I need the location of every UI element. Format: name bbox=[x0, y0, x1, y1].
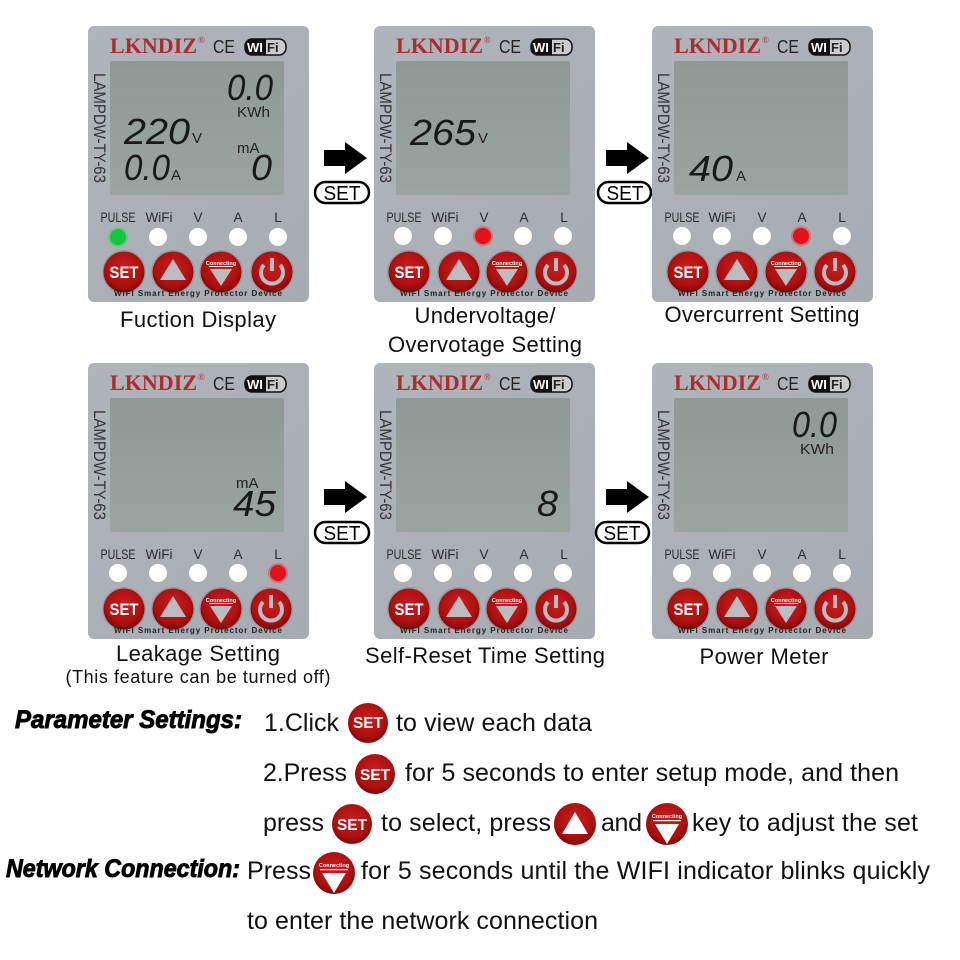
indicator labels: WiFi bbox=[432, 210, 458, 225]
indicator labels: L bbox=[838, 547, 846, 562]
indicator labels: PULSE bbox=[100, 210, 136, 225]
heading: parameter settings: Parameter Settings: bbox=[15, 706, 242, 734]
panel: function display bbox=[88, 26, 309, 302]
caption: overcurrent setting: Overcurrent Setting bbox=[664, 302, 860, 327]
CE and WiFi marks: CE bbox=[777, 374, 799, 394]
LCD screen bbox=[674, 61, 848, 195]
instruction line 2: 2.Press bbox=[263, 759, 347, 787]
LCD screen: 40 bbox=[689, 148, 733, 189]
indicator labels: L bbox=[560, 210, 568, 225]
indicator labels: L bbox=[274, 210, 282, 225]
brand logo: ® bbox=[484, 35, 491, 45]
panel: leakage setting bbox=[88, 363, 309, 639]
brand logo: LKNDIZ bbox=[674, 33, 761, 58]
brand logo: LKNDIZ bbox=[674, 370, 761, 395]
device footer: WIFI Smart Energy Protector Device bbox=[678, 626, 847, 635]
CE and WiFi marks bbox=[777, 374, 850, 394]
indicator labels: V bbox=[479, 547, 489, 562]
control buttons: SET bbox=[110, 600, 139, 619]
CE and WiFi marks: WI bbox=[533, 40, 549, 55]
indicator labels: WiFi bbox=[432, 547, 458, 562]
indicator labels: WiFi bbox=[146, 210, 172, 225]
indicator labels: WiFi bbox=[708, 210, 736, 225]
CE and WiFi marks: CE bbox=[499, 37, 521, 57]
brand logo: ® bbox=[762, 372, 769, 382]
CE and WiFi marks bbox=[499, 374, 572, 394]
caption: leakage setting bbox=[66, 641, 330, 687]
instruction line 4: for 5 seconds until the WIFI indicator blinks quickly bbox=[361, 857, 930, 885]
indicator labels: V bbox=[193, 547, 203, 562]
CE and WiFi marks bbox=[777, 37, 850, 57]
instruction line 2: SET bbox=[360, 767, 391, 784]
CE and WiFi marks: CE bbox=[777, 37, 799, 57]
device footer: WIFI Smart Energy Protector Device bbox=[400, 626, 569, 635]
CE and WiFi marks: Fi bbox=[831, 40, 843, 55]
CE and WiFi marks: Fi bbox=[267, 377, 279, 392]
CE and WiFi marks bbox=[213, 374, 286, 394]
caption: voltage setting bbox=[388, 303, 582, 357]
instruction line 3 bbox=[263, 803, 918, 845]
indicator labels: L bbox=[560, 547, 568, 562]
control buttons bbox=[102, 250, 294, 294]
instruction line 3: Connecting bbox=[652, 814, 682, 820]
LCD screen: A bbox=[736, 168, 746, 185]
model label: LAMPDW-TY-63 bbox=[376, 73, 394, 183]
CE and WiFi marks: WI bbox=[533, 377, 549, 392]
brand logo: LKNDIZ bbox=[110, 33, 197, 58]
model label: LAMPDW-TY-63 bbox=[654, 73, 672, 183]
arrow: voltage to current bbox=[598, 142, 651, 205]
indicator labels: WiFi bbox=[146, 547, 172, 562]
brand logo: LKNDIZ bbox=[110, 370, 197, 395]
LCD screen: 0.0 bbox=[792, 404, 837, 445]
indicator labels bbox=[100, 210, 282, 225]
CE and WiFi marks bbox=[213, 37, 286, 57]
LCD screen bbox=[674, 398, 848, 532]
caption: leakage setting: Leakage Setting bbox=[116, 641, 280, 666]
LCD screen bbox=[110, 61, 284, 195]
indicator labels bbox=[100, 547, 282, 562]
control buttons: Connecting bbox=[206, 598, 236, 604]
brand logo: ® bbox=[484, 372, 491, 382]
control buttons bbox=[666, 250, 857, 294]
indicator labels: A bbox=[797, 547, 807, 562]
indicator labels: V bbox=[757, 547, 767, 562]
brand logo: ® bbox=[198, 372, 205, 382]
arrow: function to voltage bbox=[315, 142, 369, 205]
CE and WiFi marks: WI bbox=[247, 377, 263, 392]
arrow: voltage to current: SET bbox=[606, 183, 644, 205]
control buttons bbox=[666, 587, 857, 631]
indicator labels bbox=[386, 547, 568, 562]
LCD screen: KWh bbox=[800, 441, 834, 458]
arrow: reset to meter: SET bbox=[604, 523, 640, 545]
arrow: function to voltage: SET bbox=[324, 183, 360, 205]
control buttons: Connecting bbox=[492, 261, 522, 267]
CE and WiFi marks: Fi bbox=[553, 377, 565, 392]
arrow: leakage to reset bbox=[315, 481, 369, 545]
indicator labels bbox=[664, 547, 846, 562]
LCD screen: V bbox=[478, 130, 488, 147]
LCD screen: 0.0 bbox=[227, 67, 273, 108]
CE and WiFi marks: WI bbox=[811, 377, 827, 392]
LCD screen: 265 bbox=[409, 112, 477, 153]
arrow: reset to meter bbox=[596, 481, 649, 545]
control buttons: Connecting bbox=[206, 261, 236, 267]
indicator lights bbox=[394, 564, 572, 582]
indicator labels: L bbox=[838, 210, 846, 225]
device footer: WIFI Smart Energy Protector Device bbox=[678, 289, 847, 298]
instruction line 3: SET bbox=[337, 817, 368, 834]
LCD screen bbox=[396, 61, 570, 195]
indicator labels: V bbox=[757, 210, 767, 225]
LCD screen: 0.0 bbox=[124, 147, 170, 188]
control buttons: SET bbox=[674, 600, 703, 619]
instruction line 3: press bbox=[263, 809, 324, 837]
brand logo: LKNDIZ bbox=[396, 33, 483, 58]
LCD screen: 45 bbox=[233, 483, 277, 524]
indicator labels bbox=[386, 210, 568, 225]
instruction line 4 bbox=[247, 852, 930, 894]
LCD screen: 8 bbox=[537, 483, 558, 524]
control buttons: SET bbox=[674, 263, 703, 282]
indicator lights bbox=[673, 564, 851, 582]
instruction line 4: Press bbox=[247, 857, 311, 885]
LCD screen: 0 bbox=[251, 147, 272, 188]
panel: power meter bbox=[652, 363, 873, 639]
caption: leakage setting: (This feature can be turned off) bbox=[66, 667, 330, 687]
instruction line 2 bbox=[263, 754, 899, 794]
indicator labels: PULSE bbox=[386, 547, 422, 562]
model label: LAMPDW-TY-63 bbox=[90, 73, 108, 183]
CE and WiFi marks: Fi bbox=[553, 40, 565, 55]
LCD screen: mA bbox=[236, 475, 258, 492]
control buttons bbox=[387, 250, 578, 294]
CE and WiFi marks: WI bbox=[247, 40, 263, 55]
indicator lights bbox=[109, 563, 288, 583]
instruction line 1 bbox=[264, 703, 592, 743]
arrow: leakage to reset: SET bbox=[324, 523, 360, 545]
control buttons: SET bbox=[110, 263, 139, 282]
instruction line 1: SET bbox=[353, 715, 384, 732]
panel: self-reset time setting bbox=[374, 363, 595, 639]
indicator labels: V bbox=[479, 210, 489, 225]
caption: function display: Fuction Display bbox=[120, 307, 276, 332]
indicator labels: PULSE bbox=[100, 547, 136, 562]
LCD screen: 220 bbox=[123, 111, 190, 152]
indicator lights bbox=[394, 226, 572, 246]
instruction line 5: to enter the network connection bbox=[247, 907, 598, 935]
indicator labels: A bbox=[519, 547, 529, 562]
instruction line 2: for 5 seconds to enter setup mode, and then bbox=[405, 759, 899, 787]
instruction line 3: to select, press bbox=[381, 809, 551, 837]
LCD screen: KWh bbox=[237, 104, 270, 121]
CE and WiFi marks: Fi bbox=[831, 377, 843, 392]
heading: network connection: Network Connection: bbox=[6, 855, 240, 883]
caption: voltage setting: Overvotage Setting bbox=[388, 332, 582, 357]
control buttons bbox=[102, 587, 293, 631]
caption: self-reset time setting: Self-Reset Time Setting bbox=[365, 643, 605, 668]
indicator labels bbox=[664, 210, 846, 225]
caption: power meter: Power Meter bbox=[700, 644, 828, 669]
brand logo: ® bbox=[762, 35, 769, 45]
CE and WiFi marks: CE bbox=[213, 37, 235, 57]
device footer: WIFI Smart Energy Protector Device bbox=[400, 289, 569, 298]
brand logo: LKNDIZ bbox=[396, 370, 483, 395]
indicator lights bbox=[108, 227, 287, 247]
instruction line 1: to view each data bbox=[396, 709, 592, 737]
indicator labels: PULSE bbox=[664, 210, 700, 225]
control buttons: Connecting bbox=[771, 261, 801, 267]
control buttons: SET bbox=[394, 263, 424, 282]
indicator labels: L bbox=[274, 547, 282, 562]
indicator labels: PULSE bbox=[664, 547, 700, 562]
LCD screen bbox=[110, 398, 284, 532]
control buttons: SET bbox=[394, 600, 424, 619]
instruction line 3: key to adjust the set bbox=[692, 809, 918, 837]
device footer: WIFI Smart Energy Protector Device bbox=[114, 289, 283, 298]
instruction line 1: 1.Click bbox=[264, 709, 340, 737]
caption: voltage setting: Undervoltage/ bbox=[414, 303, 556, 328]
CE and WiFi marks: CE bbox=[213, 374, 235, 394]
CE and WiFi marks: WI bbox=[811, 40, 827, 55]
panel: voltage setting bbox=[374, 26, 595, 302]
model label: LAMPDW-TY-63 bbox=[376, 410, 394, 520]
LCD screen: A bbox=[171, 167, 181, 184]
device footer: WIFI Smart Energy Protector Device bbox=[114, 626, 283, 635]
indicator labels: A bbox=[797, 210, 807, 225]
CE and WiFi marks: Fi bbox=[267, 40, 279, 55]
control buttons: Connecting bbox=[771, 598, 801, 604]
brand logo: ® bbox=[198, 35, 205, 45]
LCD screen: mA bbox=[237, 140, 260, 157]
control buttons bbox=[387, 587, 578, 631]
indicator lights bbox=[673, 226, 851, 246]
indicator labels: WiFi bbox=[708, 547, 736, 562]
control buttons: Connecting bbox=[492, 598, 522, 604]
indicator labels: PULSE bbox=[386, 210, 422, 225]
instruction line 4: Connecting bbox=[319, 863, 349, 869]
indicator labels: V bbox=[193, 210, 203, 225]
panel: overcurrent setting bbox=[652, 26, 873, 302]
indicator labels: A bbox=[233, 547, 243, 562]
LCD screen bbox=[396, 398, 570, 532]
indicator labels: A bbox=[233, 210, 243, 225]
indicator labels: A bbox=[519, 210, 529, 225]
model label: LAMPDW-TY-63 bbox=[654, 410, 672, 520]
CE and WiFi marks: CE bbox=[499, 374, 521, 394]
LCD screen: V bbox=[192, 130, 202, 147]
CE and WiFi marks bbox=[499, 37, 572, 57]
instruction line 3: and bbox=[601, 809, 642, 837]
model label: LAMPDW-TY-63 bbox=[90, 410, 108, 520]
